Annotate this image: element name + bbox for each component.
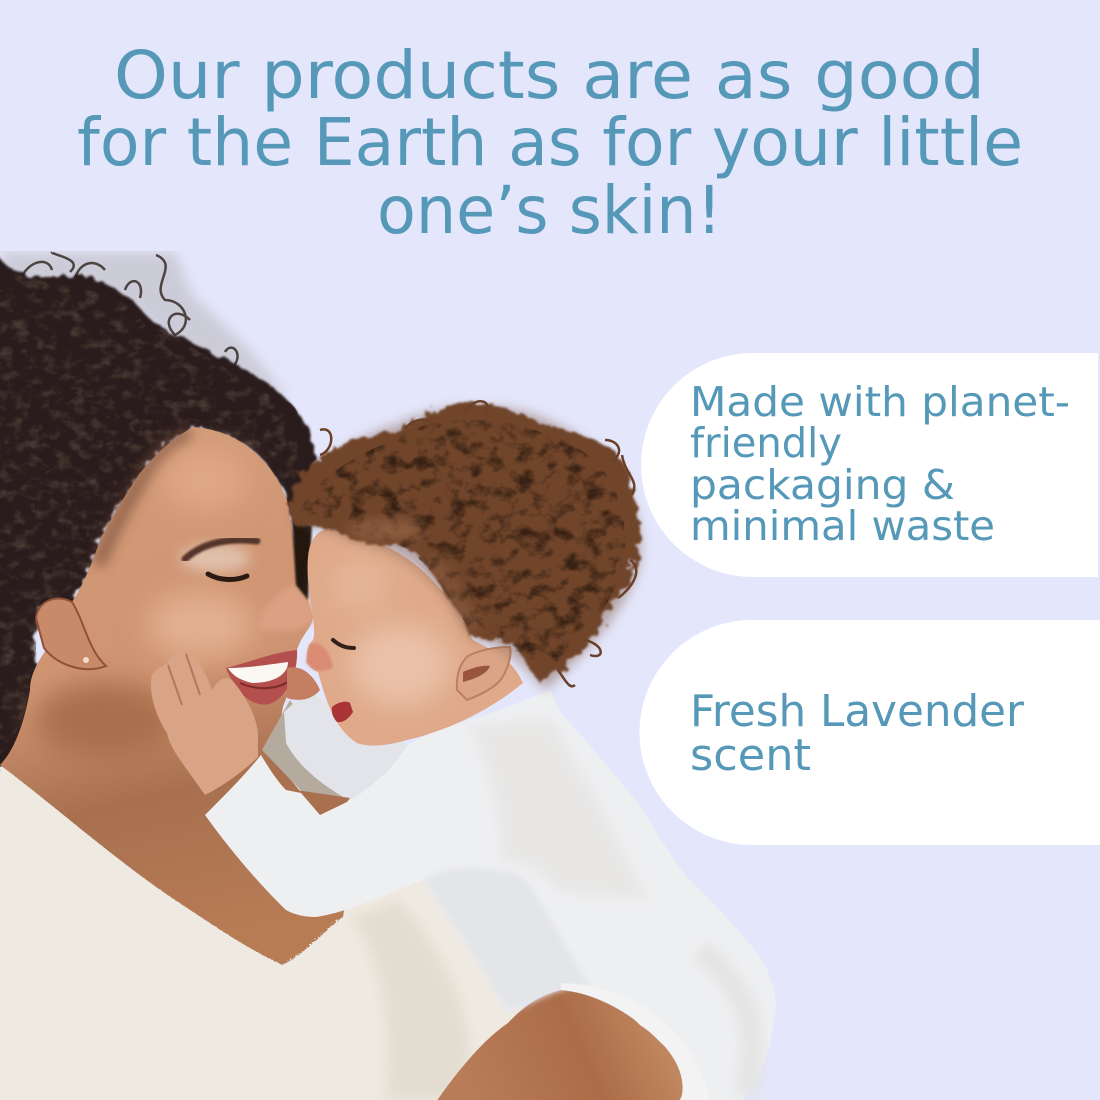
baby's face xyxy=(307,529,523,746)
title: one’s skin! xyxy=(377,172,722,249)
pill text: minimal waste xyxy=(690,502,995,550)
baby's onesie xyxy=(205,690,776,1100)
dark gap between faces xyxy=(292,520,312,600)
pill text: packaging & xyxy=(690,461,955,509)
panel: planet-friendly packaging xyxy=(641,353,1098,577)
baby's onesie chest xyxy=(284,688,410,802)
pill text: scent xyxy=(690,730,811,781)
shadow behind baby's body xyxy=(262,700,343,797)
mother's wispy hair xyxy=(0,252,297,421)
hairline shadow xyxy=(98,432,190,565)
sweater shading xyxy=(350,900,470,1100)
baby's ear xyxy=(457,647,511,700)
mother's hair xyxy=(0,255,315,770)
baby's face highlights xyxy=(306,560,450,705)
mother's ear xyxy=(36,599,106,669)
pill text: Made with planet- xyxy=(690,378,1070,426)
pill background xyxy=(641,353,1098,577)
pill text: Fresh Lavender xyxy=(690,686,1025,737)
baby's diaper edge xyxy=(561,983,710,1100)
title: for the Earth as for your little xyxy=(77,104,1023,181)
baby's fingers near cheek xyxy=(287,667,320,700)
face highlights xyxy=(35,450,314,758)
title: Our products are as good xyxy=(114,37,985,114)
pill text xyxy=(690,686,1025,781)
panel: lavender scent xyxy=(640,620,1100,845)
mother's brow and eye xyxy=(185,540,257,580)
pill text xyxy=(690,378,1070,550)
skin visible under arm xyxy=(300,790,350,815)
title xyxy=(77,37,1023,249)
baby's hair xyxy=(290,403,640,690)
mother's smile xyxy=(226,650,297,705)
pill background xyxy=(640,620,1100,845)
baby's eye and mouth xyxy=(332,640,354,722)
photo: mother and baby xyxy=(0,252,776,1100)
baby's leg xyxy=(436,990,687,1100)
baby's hand xyxy=(151,652,258,795)
onesie shading xyxy=(423,720,752,1095)
baby's stray curls xyxy=(320,401,636,686)
pill text: friendly xyxy=(690,419,842,467)
mother's sweater xyxy=(0,765,530,1100)
mother's face, neck and chest xyxy=(0,427,350,965)
